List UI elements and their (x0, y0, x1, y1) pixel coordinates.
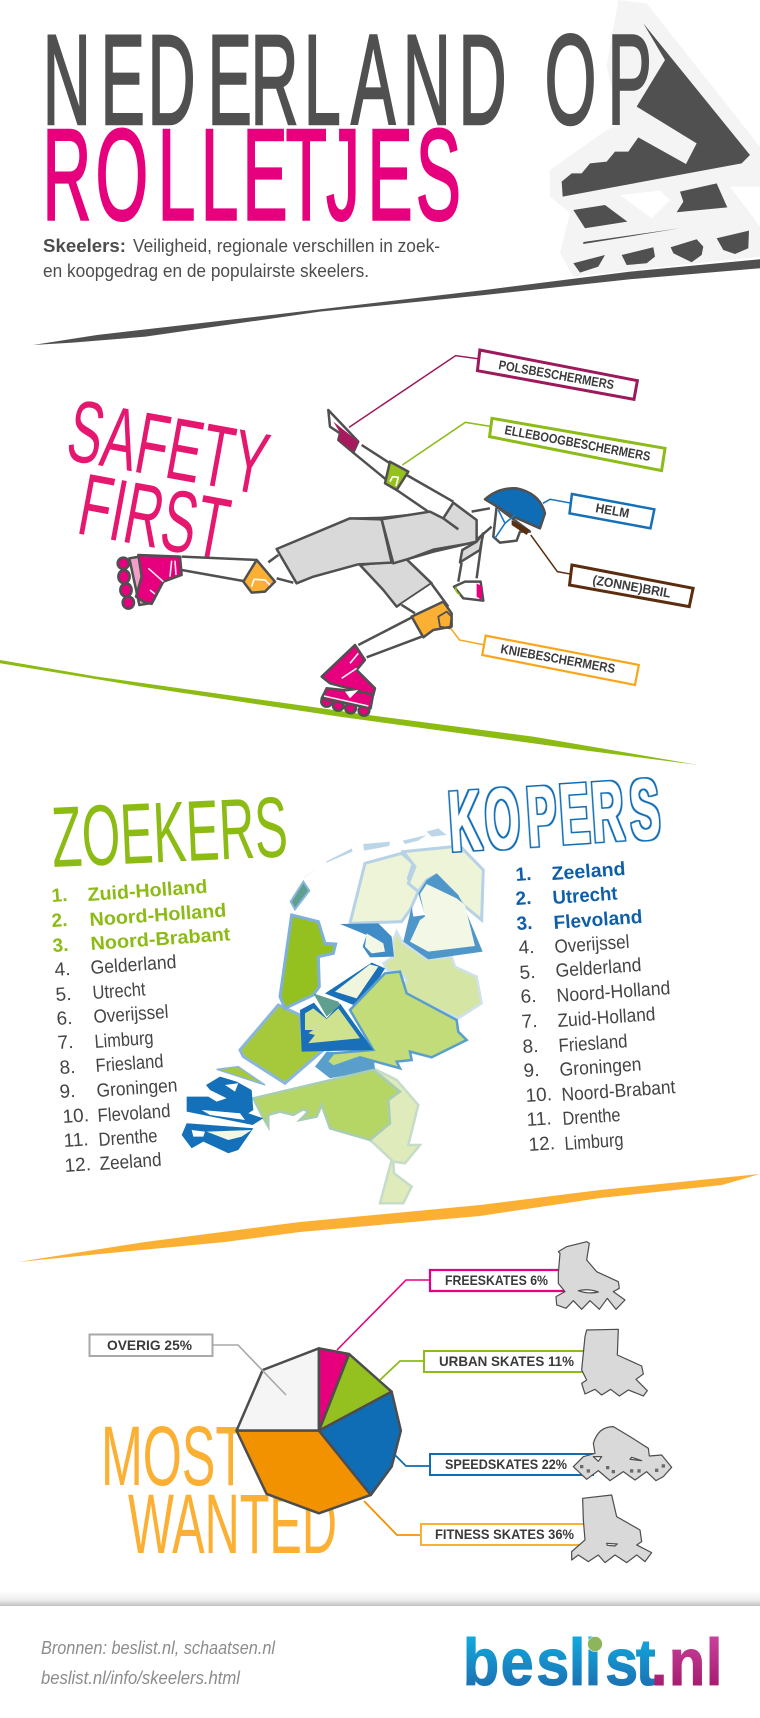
pie chart: skate types (237, 1348, 401, 1513)
callout: polsbeschermers: POLSBESCHERMERS (497, 357, 616, 392)
list: zoekers ranking: 2. (51, 910, 68, 932)
list: zoekers ranking: Groningen (96, 1075, 178, 1102)
list: zoekers ranking: 7. (57, 1032, 74, 1054)
callout: elleboogbeschermers: ELLEBOOGBESCHERMERS (503, 422, 652, 464)
list: kopers ranking: Friesland (558, 1031, 628, 1057)
list: kopers ranking: Groningen (559, 1054, 642, 1081)
list: zoekers ranking: Overijssel (93, 1002, 169, 1028)
island near zuid-holland (217, 1067, 265, 1085)
rear leg (182, 555, 297, 583)
front boot (322, 645, 375, 695)
intro text: en koopgedrag en de populairste skeelers. (43, 260, 369, 281)
list: kopers ranking: Zuid-Holland (557, 1004, 656, 1032)
heading: most wanted: MOST (101, 1409, 246, 1503)
province: friesland (350, 853, 418, 923)
list: kopers ranking: Overijssel (554, 932, 630, 958)
slice: freeskates 6% (319, 1348, 349, 1431)
icon: freeskate (556, 1242, 625, 1309)
lower hand with glove (454, 582, 483, 601)
list: zoekers ranking: Noord-Brabant (90, 924, 232, 955)
list: zoekers ranking: 10. (62, 1105, 90, 1128)
sources: Bronnen: beslist.nl, schaatsen.nl (41, 1637, 276, 1658)
province: flevoland (340, 923, 394, 957)
province: limburg (370, 1068, 420, 1203)
list: kopers ranking: Zeeland (551, 859, 626, 885)
front thigh (402, 584, 447, 618)
sources: beslist.nl/info/skeelers.html (41, 1667, 241, 1688)
icons: skate silhouettes (556, 1242, 672, 1563)
rear shorts (277, 518, 392, 583)
label: overig 25%: OVERIG 25% (107, 1337, 193, 1353)
heading: most wanted: WANTED (128, 1477, 337, 1571)
list: zoekers ranking: 5. (55, 984, 72, 1006)
province: drenthe (403, 873, 483, 959)
list: zoekers ranking: 1. (51, 885, 68, 907)
heading: safety first: SAFETY (61, 380, 276, 514)
callout: elleboogbeschermers (402, 418, 665, 471)
front wheels (321, 688, 373, 716)
divider slash: grey (33, 259, 760, 345)
list: zoekers ranking: Zuid-Holland (87, 877, 208, 906)
list: kopers ranking: Noord-Brabant (561, 1077, 677, 1106)
province: noord-brabant (253, 1070, 400, 1140)
raised arm (353, 445, 453, 512)
list: kopers ranking: Drenthe (562, 1105, 621, 1130)
neck (472, 508, 492, 538)
hand and wrist guard (328, 410, 358, 453)
list: zoekers ranking: 6. (56, 1008, 73, 1030)
label: urban skates 11%: URBAN SKATES 11% (439, 1353, 575, 1369)
knee guard (412, 602, 452, 637)
list: kopers ranking: Gelderland (555, 955, 642, 982)
callout: helm (543, 494, 654, 528)
icon: speedskate (573, 1427, 672, 1481)
intro text: Skeelers: (43, 235, 126, 256)
list: zoekers ranking: 9. (59, 1081, 76, 1103)
list: kopers ranking: Utrecht (552, 883, 619, 909)
title: NEDERLAND OP (43, 9, 652, 152)
helmet strap (495, 510, 515, 538)
list: kopers ranking: 3. (516, 913, 533, 935)
slice: fitness skates 36% (237, 1431, 371, 1513)
list: zoekers ranking: 8. (59, 1057, 76, 1079)
list: kopers ranking: 9. (523, 1060, 540, 1082)
label: urban skates 11% (380, 1351, 584, 1380)
heading: kopers: KOPERS (446, 762, 662, 870)
wadden islands (291, 828, 447, 909)
map of the Netherlands (182, 828, 483, 1203)
list: kopers ranking: 6. (520, 986, 537, 1008)
list: zoekers ranking: Utrecht (92, 979, 147, 1004)
label: fitness skates 36% (364, 1501, 584, 1545)
list: zoekers ranking: Noord-Holland (89, 900, 227, 931)
callout: kniebeschermers: KNIEBESCHERMERS (499, 641, 617, 676)
list: zoekers ranking: Gelderland (90, 952, 177, 979)
list: kopers ranking: 7. (521, 1011, 538, 1033)
label: speedskates 22%: SPEEDSKATES 22% (445, 1456, 567, 1472)
title: ROLLETJES (42, 102, 461, 247)
illustration: skater with protection gear (118, 410, 545, 716)
icon: fitness skate (572, 1495, 652, 1563)
list: kopers ranking: Noord-Holland (556, 978, 671, 1007)
list: kopers ranking: Limburg (564, 1130, 624, 1155)
callout: (zonne)bril (531, 535, 693, 607)
logo: beslist.nl: beslist (463, 1626, 656, 1700)
list: zoekers ranking: Friesland (95, 1051, 164, 1077)
list: kopers ranking: 5. (519, 962, 536, 984)
footer shadow (0, 1591, 760, 1606)
green slope (0, 660, 698, 765)
elbow guard (385, 462, 408, 490)
lower arm (458, 542, 482, 582)
list: kopers ranking: 2. (515, 888, 532, 910)
list: kopers ranking: 4. (518, 937, 535, 959)
list: zoekers ranking: Flevoland (97, 1101, 171, 1127)
helmet (485, 488, 545, 528)
callout: kniebeschermers (451, 628, 639, 685)
heading: zoekers: ZOEKERS (50, 779, 290, 886)
list: kopers ranking (515, 859, 677, 1156)
list: zoekers ranking: 4. (54, 959, 71, 981)
slice: speedskates 22% (319, 1392, 401, 1495)
heading: most wanted (101, 1409, 337, 1571)
province: utrecht north outline (325, 963, 385, 1008)
logo: beslist.nl: .nl (651, 1626, 722, 1700)
front shin (358, 617, 422, 657)
label: fitness skates 36%: FITNESS SKATES 36% (435, 1526, 575, 1542)
label: speedskates 22% (395, 1454, 594, 1475)
icon: urban skate (582, 1329, 647, 1396)
callout: (zonne)bril: (ZONNE)BRIL (591, 572, 672, 601)
province: overijssel (383, 932, 482, 1018)
list: kopers ranking: 8. (522, 1036, 539, 1058)
province: gelderland (315, 972, 467, 1078)
list: zoekers ranking: 11. (63, 1129, 89, 1152)
list: zoekers ranking: 12. (64, 1154, 92, 1177)
label: overig 25% (90, 1334, 286, 1395)
rear knee pad (243, 560, 275, 593)
list: zoekers ranking: 3. (52, 935, 69, 957)
province: zuid-holland (240, 1005, 323, 1083)
intro text (43, 235, 440, 281)
list: kopers ranking: 11. (526, 1108, 552, 1131)
heading: safety first: FIRST (72, 454, 237, 579)
lower sleeve (460, 533, 483, 562)
list: zoekers ranking: Zeeland (99, 1150, 162, 1175)
divider slash: orange (18, 1174, 760, 1262)
heading: safety first (61, 380, 276, 579)
list: kopers ranking: 12. (528, 1133, 556, 1156)
intro text: Veiligheid, regionale verschillen in zoek- (133, 235, 440, 256)
callout: helm: HELM (594, 500, 631, 521)
sunglasses (512, 520, 530, 535)
rear boot (136, 555, 182, 604)
province: groningen (403, 846, 483, 920)
province: zeeland (182, 1077, 263, 1153)
list: kopers ranking: 1. (515, 864, 532, 886)
label: freeskates 6% (337, 1270, 565, 1350)
slice: urban skates 11% (319, 1354, 392, 1431)
label: freeskates 6%: FREESKATES 6% (445, 1272, 548, 1288)
list: zoekers ranking (51, 877, 232, 1177)
icon: large skate in header (550, 0, 760, 277)
province: noord-holland (280, 915, 336, 1008)
list: kopers ranking: Flevoland (553, 907, 643, 934)
rear wheels (118, 557, 150, 609)
front leg shorts (360, 559, 432, 607)
teal overlap (313, 993, 340, 1017)
face (493, 507, 530, 543)
list: zoekers ranking: Drenthe (98, 1126, 158, 1151)
sources (41, 1637, 276, 1688)
list: kopers ranking: 10. (525, 1084, 553, 1107)
list: zoekers ranking: Limburg (94, 1028, 154, 1053)
title (42, 9, 652, 247)
slice: overig 25% (237, 1348, 319, 1431)
province: utrecht (300, 1003, 373, 1052)
callout: polsbeschermers (349, 350, 637, 427)
torso (382, 503, 477, 563)
